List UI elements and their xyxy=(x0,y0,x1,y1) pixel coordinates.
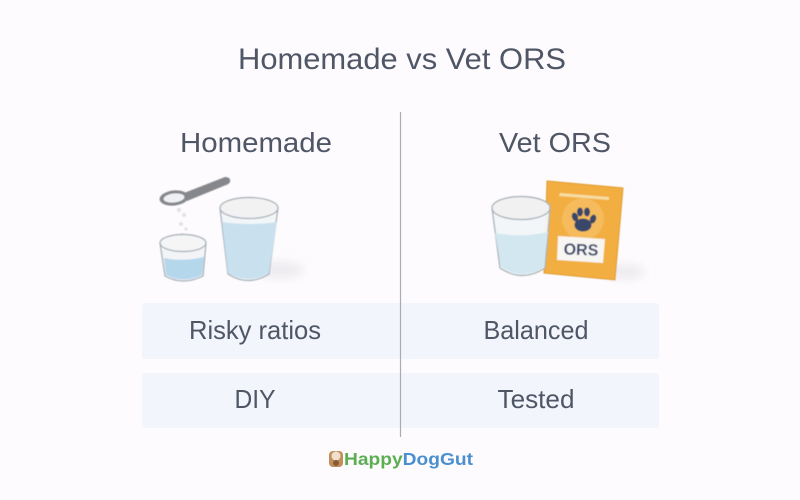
title: Homemade vs Vet ORS xyxy=(238,43,566,76)
icon: water glass xyxy=(492,196,550,276)
row: DIY / Tested: DIY xyxy=(234,384,276,414)
row: Risky ratios / Balanced: Risky ratios xyxy=(189,315,321,345)
label: ORS: ORS xyxy=(563,241,599,260)
icon: tall glass xyxy=(220,198,278,280)
row: Risky ratios / Balanced: Balanced xyxy=(484,315,588,345)
icon: homemade spoon and glasses xyxy=(159,177,304,281)
logo: HappyDogGut: Happy DogGut xyxy=(344,449,473,469)
icon: paw xyxy=(571,208,597,232)
icon: vet ORS glass and sachet xyxy=(492,181,645,280)
icon: dog xyxy=(329,451,343,467)
row: Risky ratios / Balanced xyxy=(142,303,659,359)
row: DIY / Tested: Tested xyxy=(498,384,574,414)
icon: small glass xyxy=(160,234,206,281)
icon: sachet xyxy=(544,181,623,280)
heading: Homemade: Homemade xyxy=(180,127,332,158)
heading: Vet ORS: Vet ORS xyxy=(499,127,611,158)
icon: falling salt xyxy=(177,208,188,237)
icon: spoon xyxy=(159,177,230,207)
row: DIY / Tested xyxy=(142,373,659,428)
